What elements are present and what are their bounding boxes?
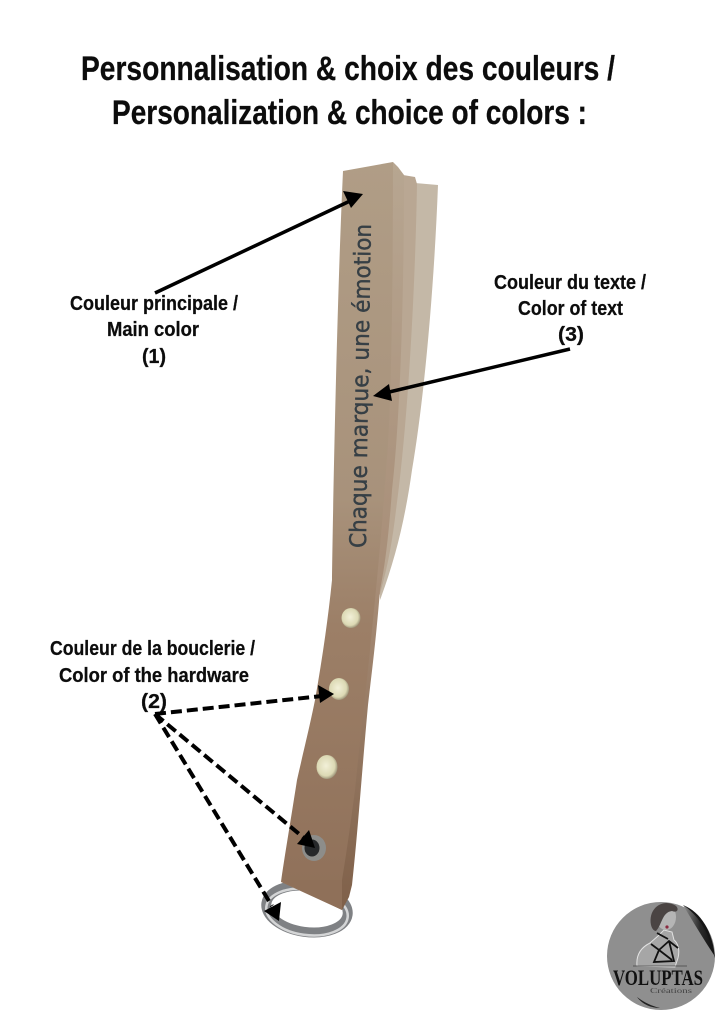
eyelet bbox=[302, 835, 326, 861]
logo curl bottom bbox=[637, 997, 660, 1008]
strap front face bbox=[281, 162, 393, 910]
rivet 2 bbox=[329, 678, 349, 700]
arrow: hardware rivet bbox=[155, 685, 334, 714]
logo: Voluptas Creations bbox=[607, 902, 715, 1010]
label: main color: Main color bbox=[107, 319, 199, 341]
logo figure bbox=[633, 903, 687, 967]
back strap layers bbox=[372, 175, 438, 600]
metal ring bbox=[263, 881, 351, 940]
rivet 3 bbox=[316, 755, 338, 779]
label: text color: (3) bbox=[558, 324, 584, 346]
label: main color bbox=[70, 293, 238, 368]
strap bottom wedge bbox=[281, 880, 342, 910]
label: text color: Couleur du texte / bbox=[494, 272, 646, 294]
logo subtitle: Créations bbox=[650, 987, 692, 995]
label: hardware color bbox=[50, 638, 255, 713]
arrow: text color bbox=[373, 349, 570, 401]
arrow: main color bbox=[155, 191, 363, 293]
arrow: hardware eyelet bbox=[155, 714, 315, 848]
strap text: Chaque marque, une émotion bbox=[348, 226, 373, 547]
label: hardware color: Color of the hardware bbox=[59, 665, 249, 687]
title bbox=[81, 50, 615, 132]
label: main color: Couleur principale / bbox=[70, 293, 238, 315]
rivet 1 bbox=[342, 608, 360, 628]
title: Personnalisation & choix des couleurs / bbox=[81, 50, 615, 88]
logo page curl bbox=[683, 905, 715, 958]
label: text color: Color of text bbox=[518, 298, 623, 320]
arrow: hardware ring bbox=[155, 714, 281, 921]
label: text color bbox=[494, 272, 646, 346]
label: main color: (1) bbox=[142, 346, 166, 368]
leather strap bbox=[223, 162, 478, 938]
label: hardware color: (2) bbox=[141, 691, 167, 713]
title: Personalization & choice of colors : bbox=[112, 94, 587, 132]
strap side edge bbox=[340, 162, 404, 910]
logo disc bbox=[607, 902, 715, 1010]
label: hardware color: Couleur de la bouclerie / bbox=[50, 638, 255, 660]
